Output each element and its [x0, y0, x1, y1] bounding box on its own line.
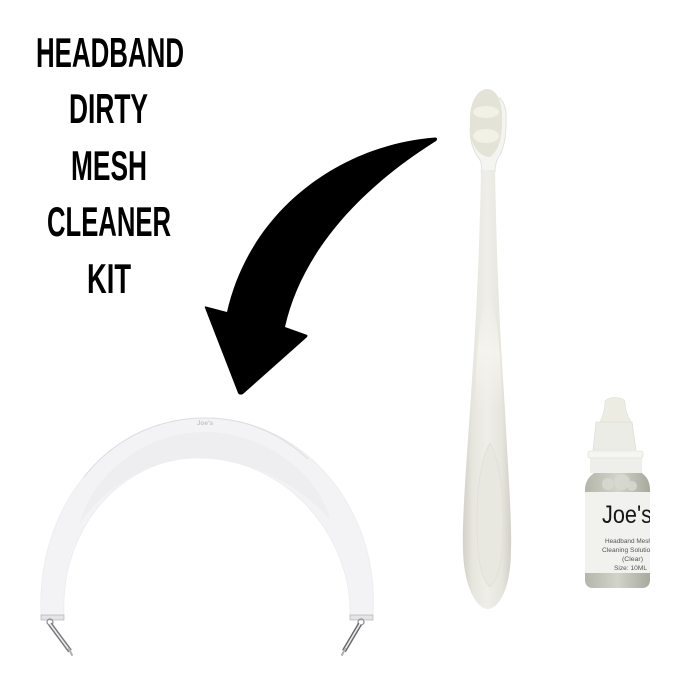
bubbles: [602, 474, 637, 491]
headband body: [41, 418, 373, 615]
headband: [41, 418, 373, 655]
label text: Cleaning Solution: [602, 547, 654, 554]
label contents: [602, 506, 650, 570]
bottle cap: [593, 422, 636, 450]
bottle body: [585, 472, 650, 588]
label text: Headband Mesh: [605, 538, 652, 545]
headband top edge shading: [84, 418, 308, 477]
right connector: [342, 615, 373, 655]
label text: (Clear): [622, 556, 643, 563]
bottle neck: [590, 458, 642, 473]
upper grip highlight: [475, 293, 502, 410]
bristle highlight bottom: [473, 129, 499, 143]
headband mesh panel: [80, 432, 330, 523]
handle grip: [477, 443, 503, 587]
brush head holder: [470, 98, 506, 172]
title: [36, 29, 184, 302]
title: KIT: [87, 255, 131, 302]
brush handle: [463, 170, 511, 609]
left connector: [41, 615, 72, 655]
dropper tip: [600, 398, 631, 422]
bottle collar: [588, 451, 643, 458]
bristles: [470, 89, 502, 157]
label text: [602, 538, 650, 570]
bristle highlight top: [473, 106, 499, 118]
label text: Size: 10ML: [614, 565, 647, 572]
dropper bottle: [585, 398, 654, 588]
title: HEADBAND: [36, 29, 184, 76]
brand: Joe's: [602, 501, 652, 529]
title: MESH: [71, 142, 147, 189]
bottle label: [585, 492, 650, 573]
toothbrush: [463, 89, 511, 609]
title: DIRTY: [69, 85, 148, 132]
title: CLEANER: [47, 198, 171, 245]
headband logo: Joe's: [197, 420, 214, 427]
arrow: [205, 138, 437, 395]
